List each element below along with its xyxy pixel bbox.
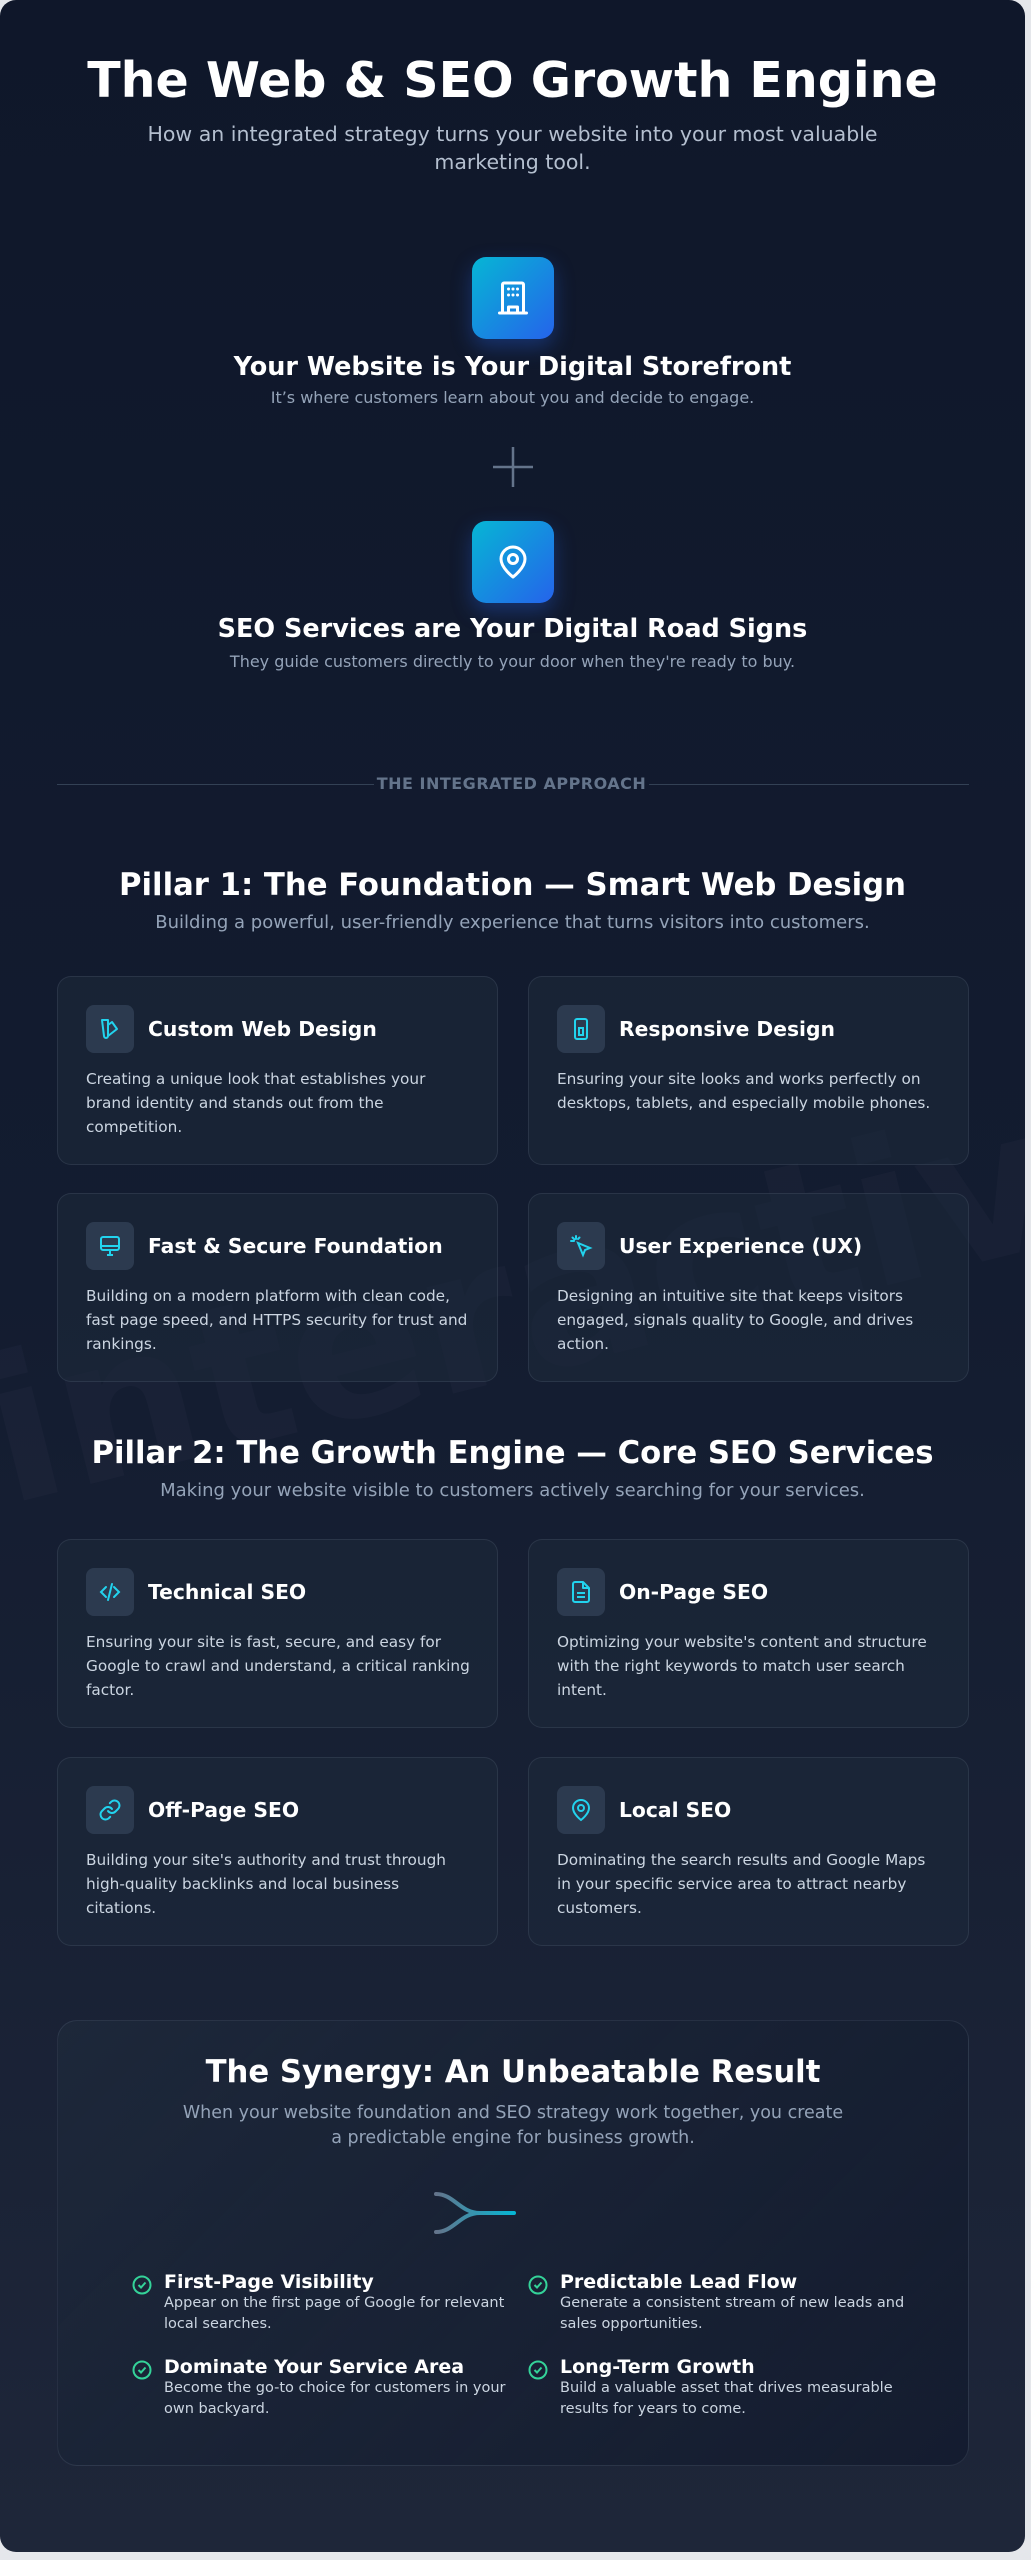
card: custom web design	[57, 976, 498, 1165]
benefit: first-page visibility: First-Page Visibility	[164, 2271, 374, 2293]
text: synergy sub: a predictable engine for business growth.	[331, 2128, 695, 2148]
card: responsive design: Responsive Design	[619, 1017, 835, 1041]
card: off-page seo: Off-Page SEO	[148, 1798, 299, 1822]
card: technical seo: Ensuring your site is fast, secure, and easy for	[86, 1633, 441, 1651]
card: custom web design: Custom Web Design	[148, 1017, 377, 1041]
text: pillar 1 sub: Building a powerful, user-friendly experience that turns visitors into customers.	[155, 912, 870, 933]
card: local seo: Local SEO	[619, 1798, 731, 1822]
card: user experience: User Experience (UX)	[619, 1234, 862, 1258]
icon: monitor	[86, 1222, 134, 1270]
card: local seo	[528, 1757, 969, 1946]
icon: plus	[493, 447, 533, 487]
card: user experience	[528, 1193, 969, 1382]
card: technical seo: Technical SEO	[148, 1580, 306, 1604]
divider: integrated approach: THE INTEGRATED APPROACH	[377, 774, 646, 793]
icon: building	[472, 257, 554, 339]
card: off-page seo: citations.	[86, 1899, 156, 1917]
icon: link	[86, 1786, 134, 1834]
text: storefront: It’s where customers learn about you and decide to engage.	[271, 388, 754, 407]
icon: merge arrows	[434, 2192, 516, 2234]
title: The Web & SEO Growth Engine	[87, 52, 938, 109]
text: pillar 2 sub: Making your website visible to customers actively searching for your services.	[160, 1480, 865, 1501]
card: responsive design	[528, 976, 969, 1165]
card: responsive design: Ensuring your site looks and works perfectly on desktops, tablets, and especially mobile phones.	[557, 1070, 930, 1112]
icon: phone	[557, 1005, 605, 1053]
text: synergy sub	[183, 2103, 843, 2148]
card: technical seo	[57, 1539, 498, 1728]
benefit: dominate service area	[132, 2356, 506, 2417]
card: user experience: Designing an intuitive site that keeps visitors engaged, signals quality to Google, and drives action.	[557, 1287, 913, 1353]
heading: pillar 2: Pillar 2: The Growth Engine — Core SEO Services	[91, 1436, 934, 1471]
card: off-page seo	[57, 1757, 498, 1946]
icon: pin	[557, 1786, 605, 1834]
heading: pillar 1: Pillar 1: The Foundation — Smart Web Design	[119, 868, 906, 903]
icon: cursor click	[557, 1222, 605, 1270]
benefit: dominate service area: Become the go-to choice for customers in your own backyard.	[164, 2380, 506, 2417]
card: custom web design: Creating a unique look that establishes your	[86, 1070, 425, 1088]
benefit: predictable lead flow	[528, 2271, 904, 2332]
heading: road signs: SEO Services are Your Digital Road Signs	[218, 614, 807, 644]
subtitle: How an integrated strategy turns your website into your most valuable marketing tool.	[147, 122, 878, 174]
card: off-page seo: high-quality backlinks and local business	[86, 1875, 399, 1893]
icon: document	[557, 1568, 605, 1616]
benefit: dominate service area: Dominate Your Service Area	[164, 2356, 464, 2378]
benefit: predictable lead flow: Predictable Lead Flow	[560, 2271, 797, 2293]
icon: palette	[86, 1005, 134, 1053]
benefit: long-term growth: Long-Term Growth	[560, 2356, 755, 2378]
text: road signs: They guide customers directly to your door when they're ready to buy.	[230, 652, 795, 671]
card: off-page seo: Building your site's authority and trust through	[86, 1851, 446, 1869]
card: on-page seo: On-Page SEO	[619, 1580, 768, 1604]
benefit: long-term growth: Build a valuable asset that drives measurable results for years to come.	[560, 2380, 893, 2417]
heading: storefront: Your Website is Your Digital Storefront	[234, 352, 791, 382]
card: custom web design: brand identity and stands out from the competition.	[86, 1094, 384, 1136]
benefit: predictable lead flow: Generate a consistent stream of new leads and sales opportunities.	[560, 2295, 904, 2332]
benefit: long-term growth	[528, 2356, 893, 2417]
panel: synergy	[57, 2020, 969, 2466]
icon: map pin	[472, 521, 554, 603]
card: technical seo: Google to crawl and understand, a critical ranking factor.	[86, 1657, 470, 1699]
icon: code	[86, 1568, 134, 1616]
card: fast & secure: Building on a modern platform with clean code, fast page speed, and HTTPS security for trust and rankings.	[86, 1287, 467, 1353]
benefit: first-page visibility	[132, 2271, 504, 2332]
benefit: first-page visibility: Appear on the first page of Google for relevant local searches.	[164, 2295, 504, 2332]
card: local seo: Dominating the search results and Google Maps in your specific service area to attract nearby customers.	[557, 1851, 925, 1917]
card: on-page seo	[528, 1539, 969, 1728]
card: fast & secure	[57, 1193, 498, 1382]
card: on-page seo: Optimizing your website's content and structure with the right keywords to match user search intent.	[557, 1633, 927, 1699]
heading: synergy: The Synergy: An Unbeatable Result	[206, 2055, 820, 2090]
text: synergy sub: When your website foundation and SEO strategy work together, you create	[183, 2103, 843, 2123]
card: fast & secure: Fast & Secure Foundation	[148, 1234, 443, 1258]
